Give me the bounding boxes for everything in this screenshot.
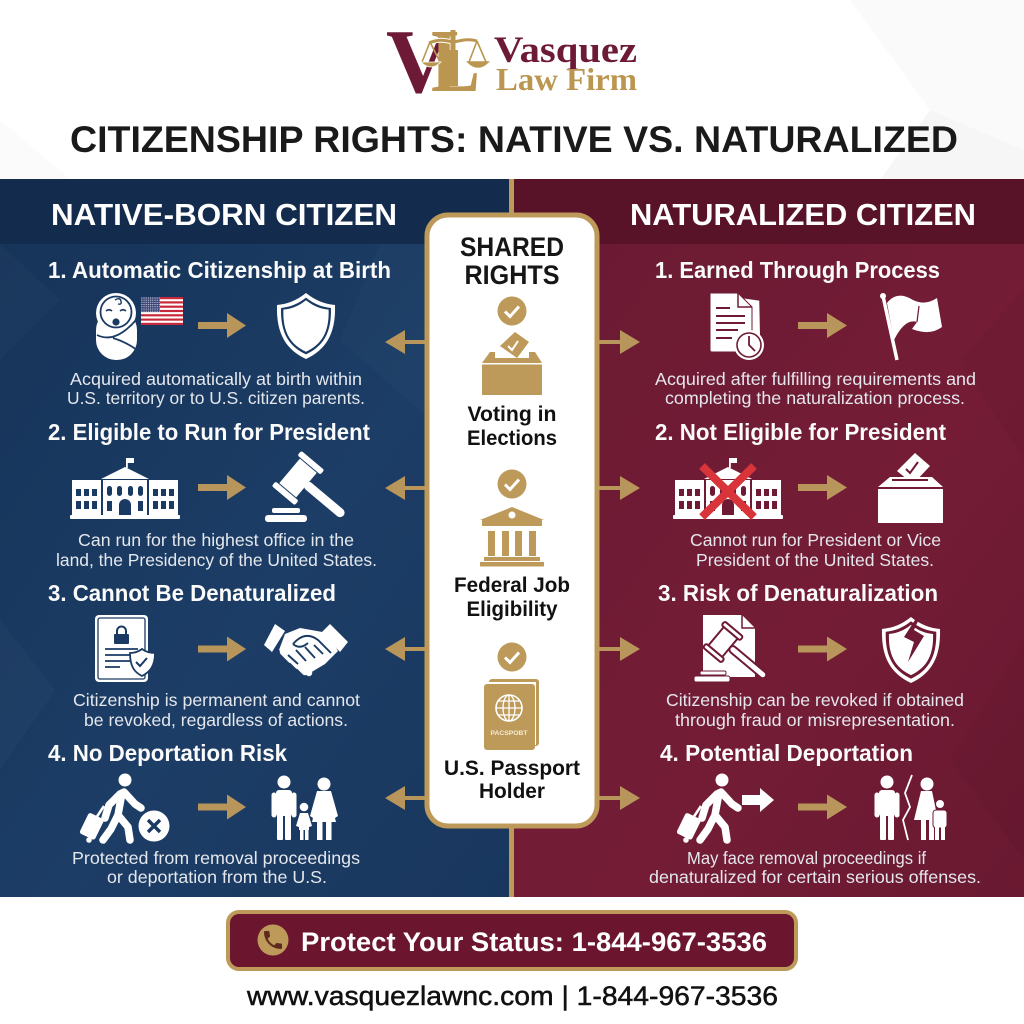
heading: shared rights: RIGHTS — [464, 260, 560, 290]
label: passport: U.S. Passport — [444, 757, 580, 780]
item 1: earned through process: Acquired after fulfilling requirements and — [655, 369, 976, 389]
label: federal job: Eligibility — [466, 598, 558, 621]
item 2: not eligible for president: Cannot run for President or Vice — [690, 530, 941, 550]
item 4: no deportation risk — [48, 740, 360, 887]
arrows: shared rights to naturalized — [598, 330, 640, 810]
arrow — [798, 313, 847, 338]
call to action button: Protect Your Status: 1-844-967-3536 — [301, 927, 767, 957]
icon: federal building — [480, 507, 544, 566]
icon: handshake — [264, 624, 348, 673]
heading: shared rights: SHARED — [460, 232, 564, 262]
panel: native-born citizen — [0, 179, 510, 897]
icon: shield — [277, 293, 335, 359]
label: passport: Holder — [479, 780, 545, 803]
icon: white house — [70, 458, 180, 519]
item 4: potential deportation: May face removal proceedings if — [687, 848, 926, 868]
item 3: cannot be denaturalized: 3. Cannot Be Denaturalized — [48, 580, 336, 606]
label: voting — [467, 403, 557, 450]
icon: flag — [880, 293, 942, 360]
panel: naturalized citizen — [514, 179, 1024, 897]
icon: white house crossed out — [673, 458, 783, 519]
arrow — [798, 636, 847, 662]
item 3: cannot be denaturalized — [48, 580, 360, 730]
logo: Vasquez — [494, 30, 637, 71]
item 3: risk of denaturalization: through fraud or misrepresentation. — [675, 710, 955, 730]
icon: passport — [484, 679, 539, 750]
arrow — [198, 313, 246, 338]
icon: traveller leaving — [676, 774, 774, 843]
label: federal job: Federal Job — [454, 574, 570, 597]
heading: native-born citizen: NATIVE-BORN CITIZEN — [51, 197, 397, 232]
label: passport — [444, 757, 580, 803]
item 4: potential deportation: 4. Potential Deportation — [660, 740, 913, 766]
icon: ballot box — [878, 453, 943, 523]
title: CITIZENSHIP RIGHTS: NATIVE VS. NATURALIZED — [70, 119, 958, 160]
item 3: risk of denaturalization: Citizenship can be revoked if obtained — [666, 690, 964, 710]
item 2: eligible for president: land, the Presidency of the United States. — [56, 550, 377, 570]
icon: swaddled baby — [96, 293, 137, 360]
item 3: cannot be denaturalized: be revoked, regardless of actions. — [84, 710, 348, 730]
icon: document with gavel — [694, 615, 776, 690]
icon: locked document — [95, 615, 155, 682]
item 2: not eligible for president: 2. Not Eligible for President — [655, 419, 946, 445]
label: voting: Voting in — [468, 403, 556, 426]
item 3: risk of denaturalization: 3. Risk of Denaturalization — [658, 580, 938, 606]
item 4: no deportation risk: Protected from removal proceedings — [72, 848, 360, 868]
icon: documents with clock — [710, 293, 764, 360]
logo: Law Firm — [496, 61, 637, 97]
arrow — [798, 475, 847, 500]
check badge — [498, 296, 526, 326]
heading: naturalized citizen: NATURALIZED CITIZEN — [630, 197, 976, 232]
icon: passport: PACSPOBT — [490, 730, 528, 737]
label: voting: Elections — [467, 427, 557, 450]
icon: scales of justice — [421, 30, 488, 86]
panel: shared rights — [427, 215, 597, 826]
item 2: eligible for president: Can run for the highest office in the — [78, 530, 354, 550]
item 1: earned through process: 1. Earned Through Process — [655, 257, 940, 283]
item 4: potential deportation — [649, 740, 981, 887]
icon: broken shield — [882, 612, 940, 683]
check badge — [498, 470, 526, 498]
item 4: potential deportation: denaturalized for certain serious offenses. — [649, 867, 981, 887]
item 4: no deportation risk: or deportation from the U.S. — [107, 867, 327, 887]
footer contact line: www.vasquezlawnc.com | 1-844-967-3536 — [246, 981, 778, 1011]
check badge — [498, 642, 526, 672]
item 2: eligible for president: 2. Eligible to Run for President — [48, 419, 370, 445]
item 3: risk of denaturalization — [658, 580, 964, 730]
arrow — [798, 794, 847, 820]
item 3: cannot be denaturalized: Citizenship is permanent and cannot — [73, 690, 360, 710]
item 1: automatic citizenship: Acquired automatically at birth within — [70, 369, 362, 389]
call to action button — [228, 912, 796, 969]
logo: L — [431, 12, 480, 111]
icon: gavel — [265, 451, 358, 534]
label: federal job — [454, 574, 570, 621]
item 2: not eligible for president: President of the United States. — [696, 550, 934, 570]
item 1: automatic citizenship — [48, 257, 391, 408]
arrows: shared rights to native-born — [385, 330, 426, 810]
center divider — [509, 179, 514, 897]
item 1: earned through process — [655, 257, 976, 408]
item 1: automatic citizenship: 1. Automatic Citizenship at Birth — [48, 257, 391, 283]
logo: V — [386, 11, 451, 112]
item 2: eligible for president — [48, 419, 377, 570]
arrow — [198, 636, 246, 662]
icon: separated family — [877, 775, 947, 840]
icon: family — [274, 776, 338, 840]
logo — [386, 11, 637, 112]
icon: phone — [258, 924, 288, 956]
item 4: no deportation risk: 4. No Deportation Risk — [48, 740, 287, 766]
arrow — [198, 475, 246, 500]
icon: ballot box — [482, 332, 542, 395]
item 1: automatic citizenship: U.S. territory or to U.S. citizen parents. — [67, 388, 365, 408]
item 2: not eligible for president — [655, 419, 946, 570]
arrow — [198, 794, 246, 820]
icon: american flag — [141, 297, 183, 325]
heading: shared rights — [460, 232, 564, 290]
item 1: earned through process: completing the naturalization process. — [665, 388, 965, 408]
icon: walking traveller with x — [79, 774, 170, 843]
